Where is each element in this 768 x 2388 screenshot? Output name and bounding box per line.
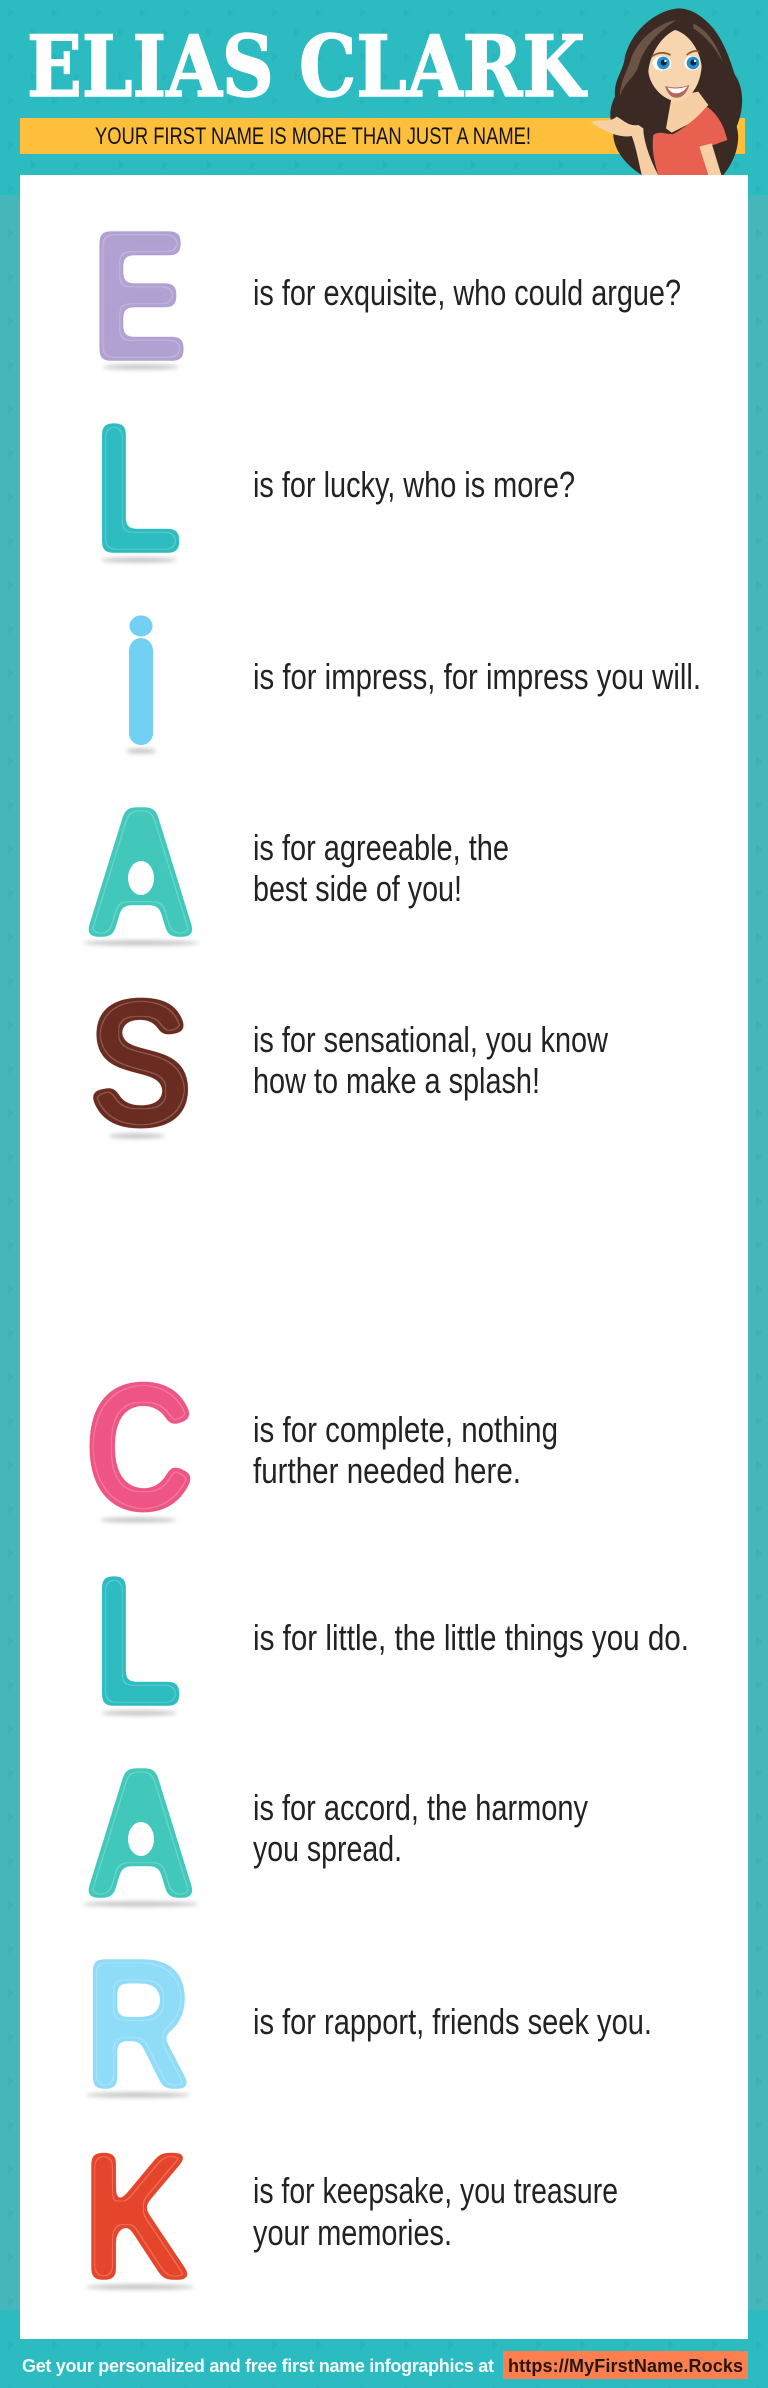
text: K lines: your memories. (253, 2212, 452, 2253)
letter row: E (91, 194, 681, 398)
text: C lines: is for complete, nothing (253, 1409, 558, 1450)
footer link: https://MyFirstName.Rocks (508, 2356, 743, 2376)
footer text: Get your personalized and free first name infographics at (22, 2356, 494, 2376)
letter row: A (83, 772, 509, 973)
text: K lines (253, 2170, 618, 2253)
letter row: S (88, 962, 609, 1163)
text: S lines: is for sensational, you know (253, 1019, 609, 1060)
icon: letter i (129, 616, 153, 745)
text: L line: is for lucky, who is more? (253, 464, 575, 505)
letter row: L second (94, 1539, 689, 1743)
icon: letter i: i (116, 583, 166, 782)
text: C lines (253, 1409, 558, 1491)
icon: letter C: C (85, 1347, 195, 1548)
text: A lines (253, 827, 509, 909)
banner (20, 118, 745, 154)
letter row: K (83, 2116, 618, 2317)
icon: letter L: L (94, 386, 182, 590)
letter row: L (94, 386, 575, 590)
icon: letter R: R (84, 1922, 192, 2127)
text: A lines: is for accord, the harmony (253, 1787, 588, 1828)
icon: letter K: K (83, 2116, 191, 2317)
text: A lines: you spread. (253, 1828, 402, 1869)
text: S lines: how to make a splash! (253, 1060, 540, 1101)
text: L line: is for little, the little things you do. (253, 1617, 689, 1658)
icon: letter S: S (88, 962, 193, 1163)
icon: letter E: E (91, 194, 188, 398)
icon: cartoon woman (591, 8, 742, 175)
footer link (503, 2351, 748, 2379)
text: A lines (253, 1787, 588, 1869)
text: A lines: is for agreeable, the (253, 827, 509, 868)
text: A lines: best side of you! (253, 868, 462, 909)
icon: letter L: L (94, 1539, 182, 1743)
title: ELIAS CLARK (27, 17, 588, 116)
letter row: R (84, 1922, 652, 2127)
text: S lines (253, 1019, 609, 1101)
text: K lines: is for keepsake, you treasure (253, 2170, 618, 2211)
banner text: YOUR FIRST NAME IS MORE THAN JUST A NAME! (95, 123, 531, 150)
icon: letter A: A (85, 1733, 196, 1934)
icon: letter A: A (85, 772, 196, 973)
text: R line: is for rapport, friends seek you. (253, 2001, 652, 2042)
text: C lines: further needed here. (253, 1450, 521, 1491)
letter row: I (116, 583, 701, 782)
letter row: A second (83, 1733, 588, 1934)
letter row: C (85, 1347, 558, 1548)
